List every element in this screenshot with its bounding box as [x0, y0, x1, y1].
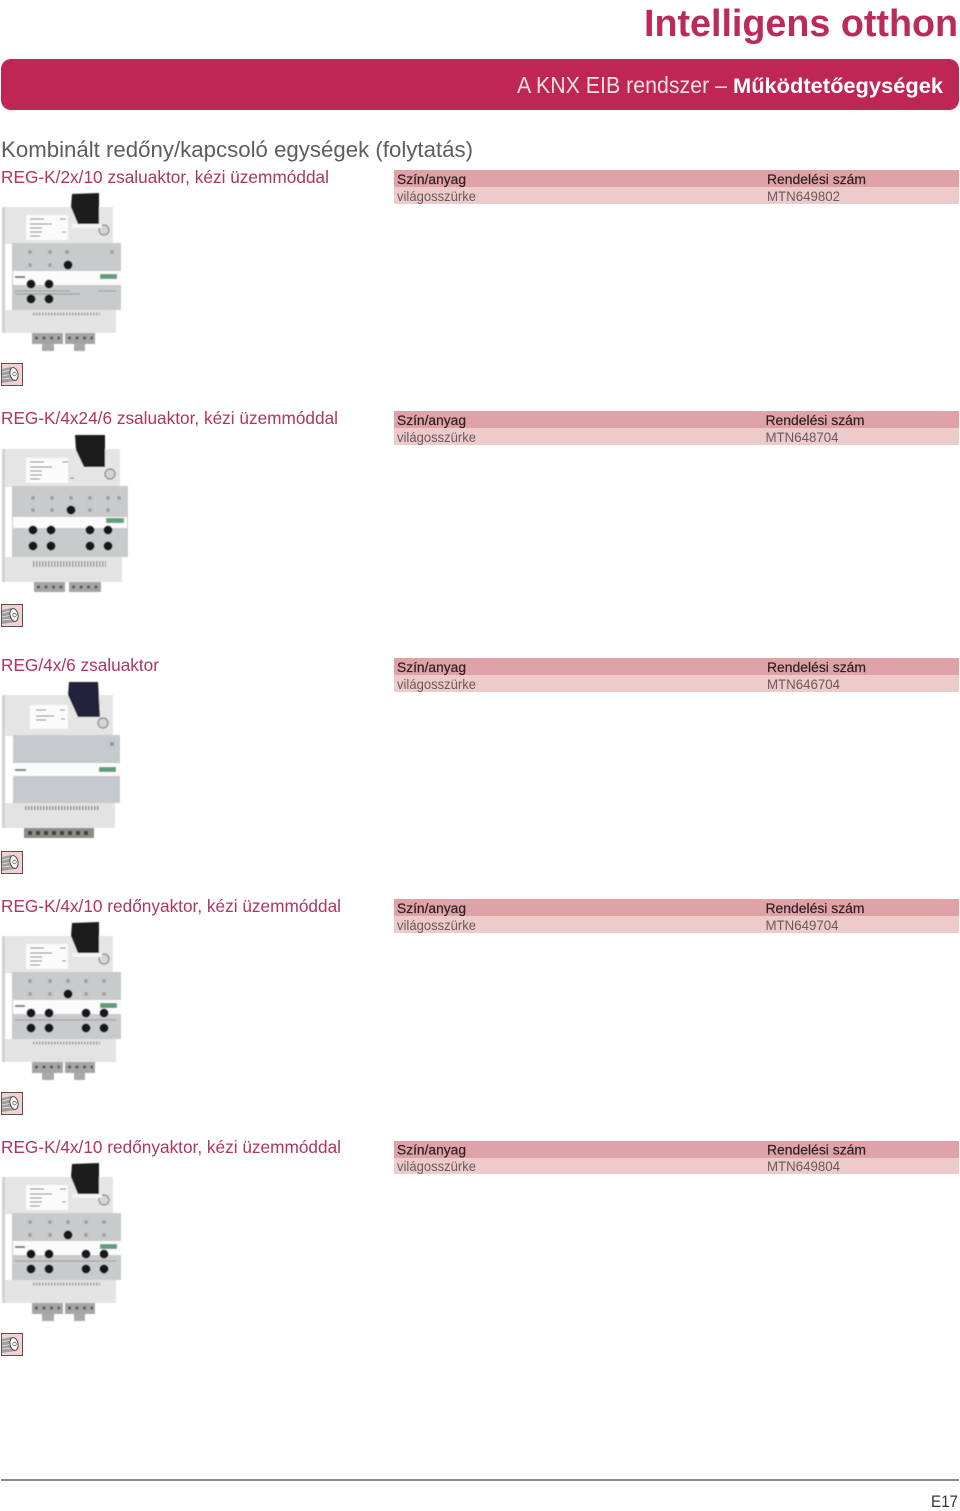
panel: product REG/4x/6: [1, 655, 959, 874]
product title: REG-K/4x24/6 zsaluaktor, kézi üzemmóddal: [1, 408, 338, 428]
icon: roller shutter tube: [2, 604, 22, 626]
device photo: [2, 193, 121, 351]
spec table: Rendelési szám: [766, 901, 864, 916]
spec table: Rendelési szám: [767, 660, 866, 675]
spec table: világosszürke: [397, 189, 476, 204]
spec table: [394, 1141, 959, 1174]
spec table: Szín/anyag: [397, 172, 466, 187]
title: Intelligens otthon: [644, 3, 958, 45]
product title: REG-K/4x/10 redőnyaktor, kézi üzemmóddal: [1, 1137, 341, 1157]
banner subtitle: A KNX EIB rendszer –: [517, 72, 727, 98]
spec table: Rendelési szám: [766, 413, 864, 428]
spec table: [394, 170, 959, 204]
device photo: [2, 1163, 121, 1321]
product title: REG/4x/6 zsaluaktor: [1, 655, 159, 675]
panel: product REG-K/4x/10 MTN649704: [1, 896, 959, 1114]
product title: REG-K/4x/10 redőnyaktor, kézi üzemmóddal: [1, 896, 341, 916]
spec table: MTN646704: [767, 677, 840, 692]
spec table: MTN649704: [766, 918, 839, 933]
spec table: Szín/anyag: [397, 901, 466, 916]
header banner: [1, 59, 959, 110]
panel: product REG-K/4x24/6: [1, 408, 959, 626]
device photo: [2, 682, 120, 838]
spec table: Rendelési szám: [767, 1142, 866, 1158]
spec table: Szín/anyag: [397, 413, 466, 428]
spec table: Szín/anyag: [397, 1142, 466, 1158]
device photo: [2, 922, 121, 1080]
icon: roller shutter tube: [2, 364, 22, 386]
spec table: [394, 899, 959, 933]
spec table: Rendelési szám: [767, 172, 866, 187]
spec table: [394, 411, 959, 445]
spec table: világosszürke: [397, 1159, 476, 1174]
section heading: Kombinált redőny/kapcsoló egységek (folytatás): [1, 137, 473, 162]
spec table: világosszürke: [397, 918, 476, 933]
icon: roller shutter tube: [2, 852, 22, 874]
icon: roller shutter tube: [2, 1334, 22, 1356]
device photo: [2, 435, 128, 592]
spec table: világosszürke: [397, 677, 476, 692]
icon: roller shutter tube: [2, 1092, 22, 1114]
spec table: MTN649802: [767, 189, 840, 204]
spec table: MTN649804: [767, 1159, 840, 1174]
spec table: világosszürke: [397, 430, 476, 445]
spec table: [394, 658, 959, 692]
spec table: Szín/anyag: [397, 660, 466, 675]
spec table: MTN648704: [766, 430, 839, 445]
panel: product REG-K/2x/10: [1, 167, 959, 386]
panel: product REG-K/4x/10 MTN649804: [1, 1137, 959, 1356]
product title: REG-K/2x/10 zsaluaktor, kézi üzemmóddal: [1, 167, 329, 187]
banner subtitle bold: Működtetőegységek: [733, 75, 943, 98]
